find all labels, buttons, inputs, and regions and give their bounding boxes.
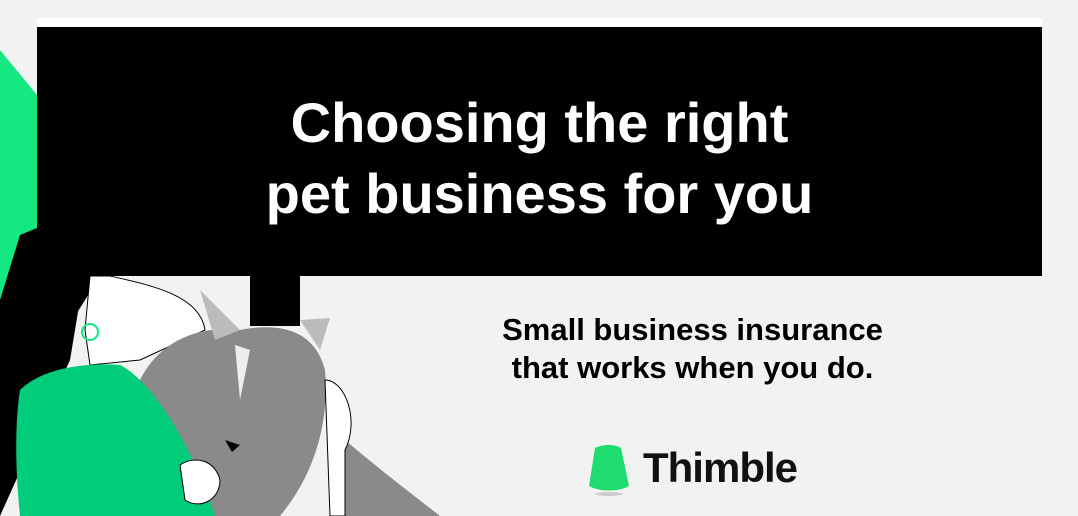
logo: Thimble (589, 444, 797, 496)
top white strip (37, 18, 1042, 27)
icon: thimble (589, 445, 629, 496)
title (266, 91, 813, 225)
title: pet business for you (266, 162, 813, 225)
tagline: that works when you do. (512, 350, 873, 385)
brand name: Thimble (643, 444, 797, 491)
title panel (37, 27, 1042, 276)
tagline (502, 312, 883, 385)
illustration: person with cat (0, 50, 440, 516)
tagline: Small business insurance (502, 312, 883, 347)
title: Choosing the right (291, 91, 788, 154)
